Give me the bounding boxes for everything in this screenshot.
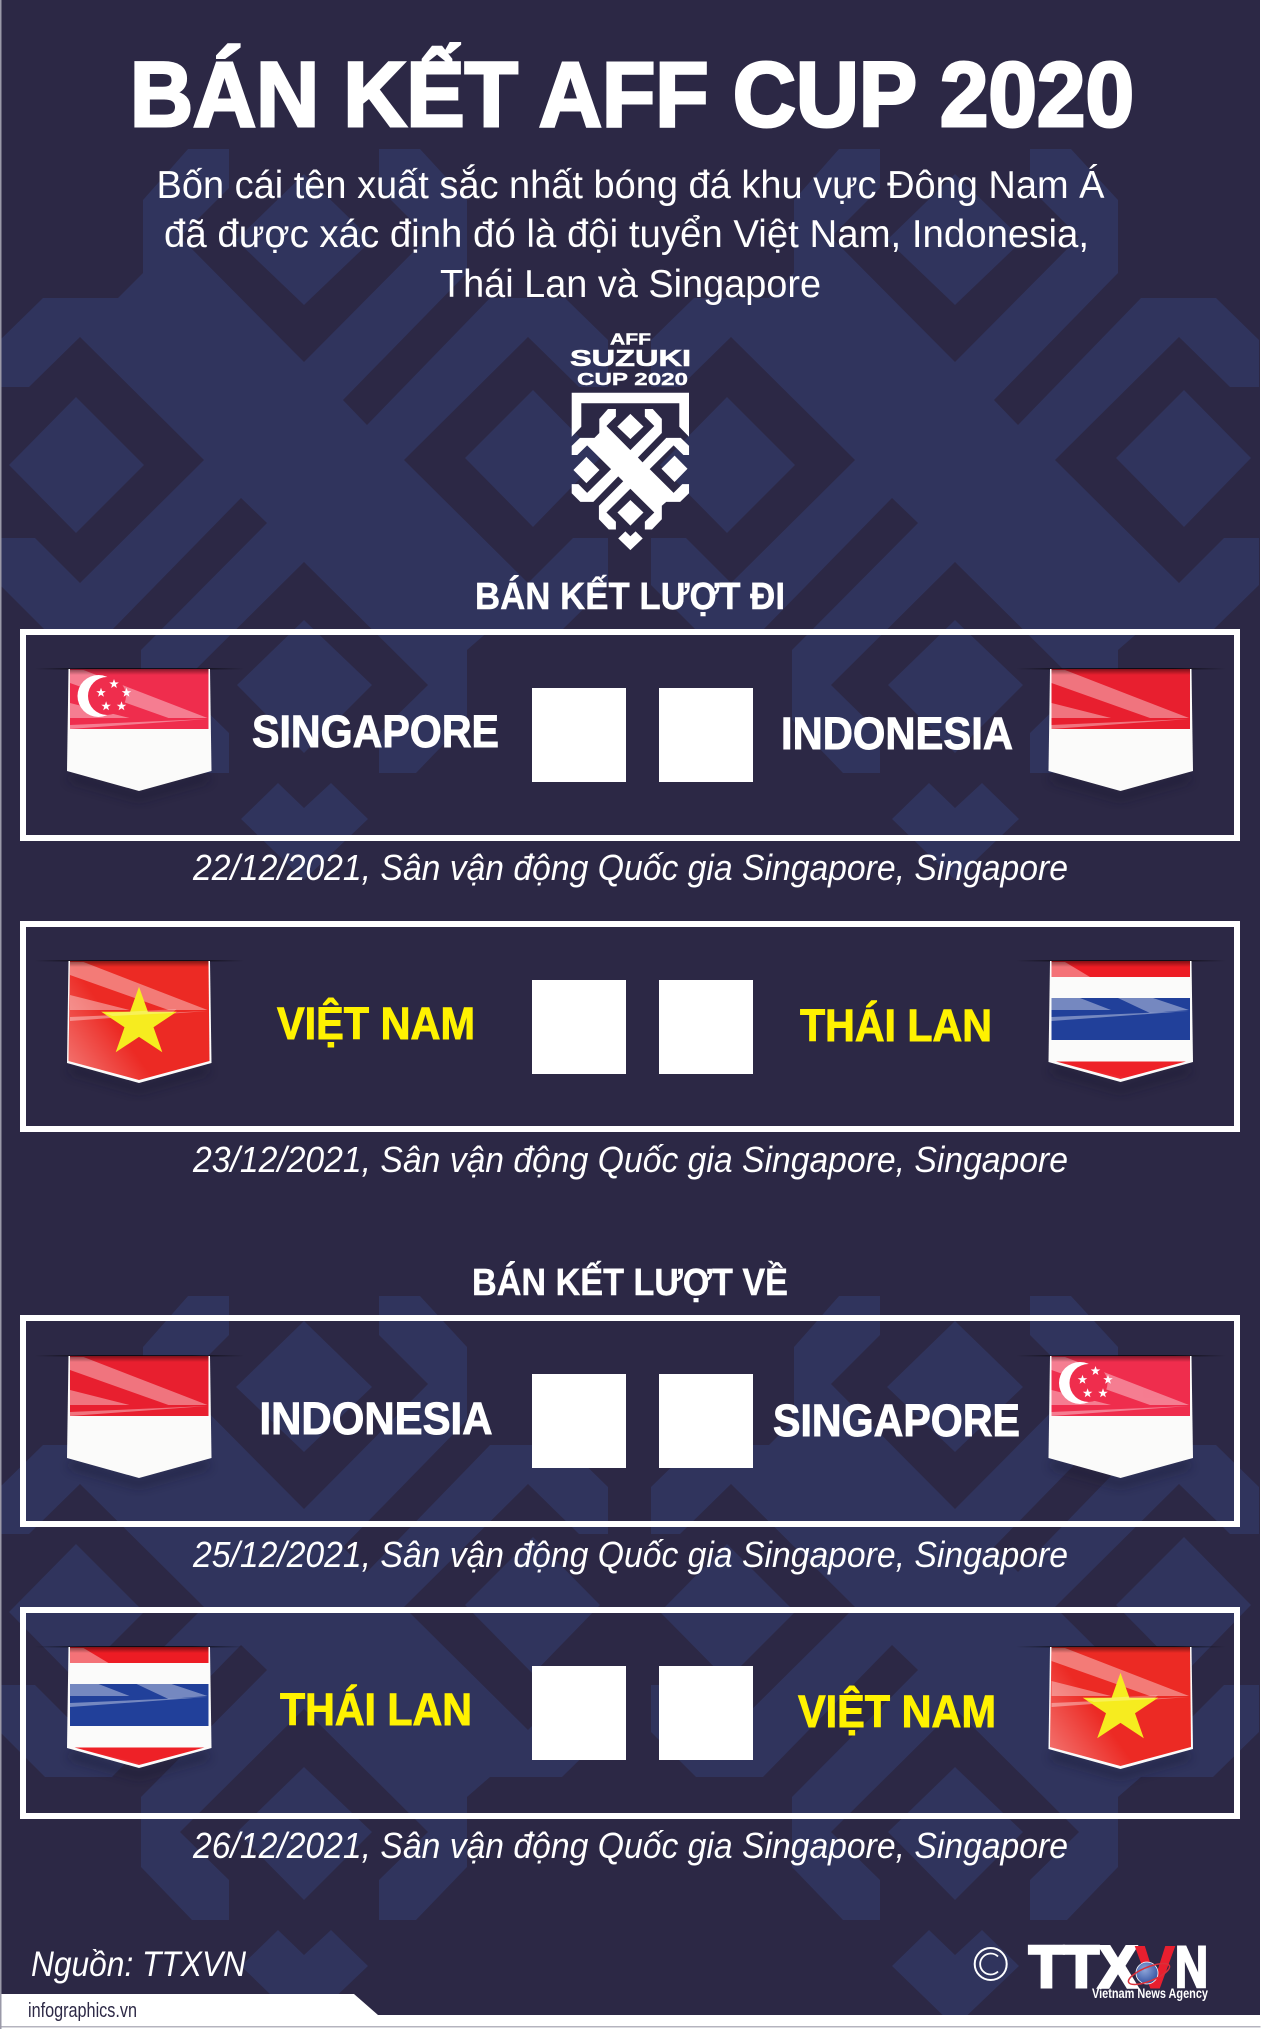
team name: Thailand: THÁI LAN bbox=[800, 1000, 992, 1051]
flag: Singapore bbox=[1016, 1355, 1226, 1488]
logo: TTXVN bbox=[1029, 1934, 1208, 2001]
logo: AFF Suzuki Cup 2020 bbox=[570, 332, 691, 550]
flag: Thailand bbox=[1016, 960, 1226, 1093]
logo: TTXVN: TTX bbox=[1029, 1935, 1137, 2000]
team name: Indonesia: INDONESIA bbox=[781, 708, 1013, 759]
footer strip bbox=[2, 1994, 1260, 2029]
match date and venue 1: 22/12/2021, Sân vận động Quốc gia Singapore, Singapore bbox=[192, 847, 1068, 888]
intro text: đã được xác định đó là đội tuyển Việt Nam, Indonesia, bbox=[164, 213, 1089, 256]
team name: Thailand: THÁI LAN bbox=[280, 1684, 472, 1735]
intro text bbox=[156, 164, 1104, 306]
match date and venue 2: 23/12/2021, Sân vận động Quốc gia Singapore, Singapore bbox=[192, 1139, 1068, 1180]
heading: first leg: BÁN KẾT LƯỢT ĐI bbox=[475, 574, 785, 618]
match panel: Viet Nam v Thailand bbox=[23, 924, 1237, 1129]
source credit: Nguồn: TTXVN bbox=[31, 1945, 247, 1984]
heading: second leg: BÁN KẾT LƯỢT VỀ bbox=[472, 1260, 788, 1304]
score box left bbox=[532, 1374, 626, 1468]
match panel: Thailand v Viet Nam bbox=[23, 1610, 1237, 1816]
flag: Indonesia bbox=[34, 1355, 244, 1488]
logo: AFF Suzuki Cup 2020: CUP 2020 bbox=[577, 369, 688, 389]
team name: Indonesia: INDONESIA bbox=[260, 1393, 492, 1444]
flag: Thailand bbox=[34, 1646, 244, 1779]
flag: Viet Nam bbox=[1016, 1646, 1226, 1779]
score box left bbox=[532, 1666, 626, 1760]
match date and venue 4: 26/12/2021, Sân vận động Quốc gia Singapore, Singapore bbox=[192, 1825, 1068, 1866]
intro text: Thái Lan và Singapore bbox=[440, 263, 821, 306]
icon: copyright bbox=[975, 1948, 1007, 1980]
score box left bbox=[532, 980, 626, 1074]
flag: Viet Nam bbox=[34, 960, 244, 1093]
intro text: Bốn cái tên xuất sắc nhất bóng đá khu vực Đông Nam Á bbox=[156, 164, 1104, 207]
flag: Singapore bbox=[34, 668, 244, 801]
flag: Indonesia bbox=[1016, 668, 1226, 801]
logo: TTXVN: V bbox=[1135, 1934, 1175, 2001]
match panel: Singapore v Indonesia bbox=[23, 632, 1237, 838]
match panel: Indonesia v Singapore bbox=[23, 1318, 1237, 1524]
score box right bbox=[659, 980, 753, 1074]
team name: Viet Nam: VIỆT NAM bbox=[277, 998, 475, 1049]
logo: AFF Suzuki Cup 2020: AFF bbox=[610, 332, 651, 348]
team name: Singapore: SINGAPORE bbox=[252, 706, 499, 757]
team name: Singapore: SINGAPORE bbox=[773, 1395, 1020, 1446]
logo: TTXVN: N bbox=[1175, 1935, 1208, 2000]
score box right bbox=[659, 1666, 753, 1760]
team name: Viet Nam: VIỆT NAM bbox=[798, 1686, 996, 1737]
logo: AFF Suzuki Cup 2020: SUZUKI bbox=[570, 345, 691, 371]
score box right bbox=[659, 1374, 753, 1468]
logo: TTXVN: Vietnam News Agency bbox=[1092, 1986, 1208, 2001]
score box right bbox=[659, 688, 753, 782]
match date and venue 3: 25/12/2021, Sân vận động Quốc gia Singapore, Singapore bbox=[192, 1534, 1068, 1575]
site name: infographics.vn bbox=[28, 2000, 137, 2022]
title: BÁN KẾT AFF CUP 2020 bbox=[130, 43, 1134, 146]
score box left bbox=[532, 688, 626, 782]
